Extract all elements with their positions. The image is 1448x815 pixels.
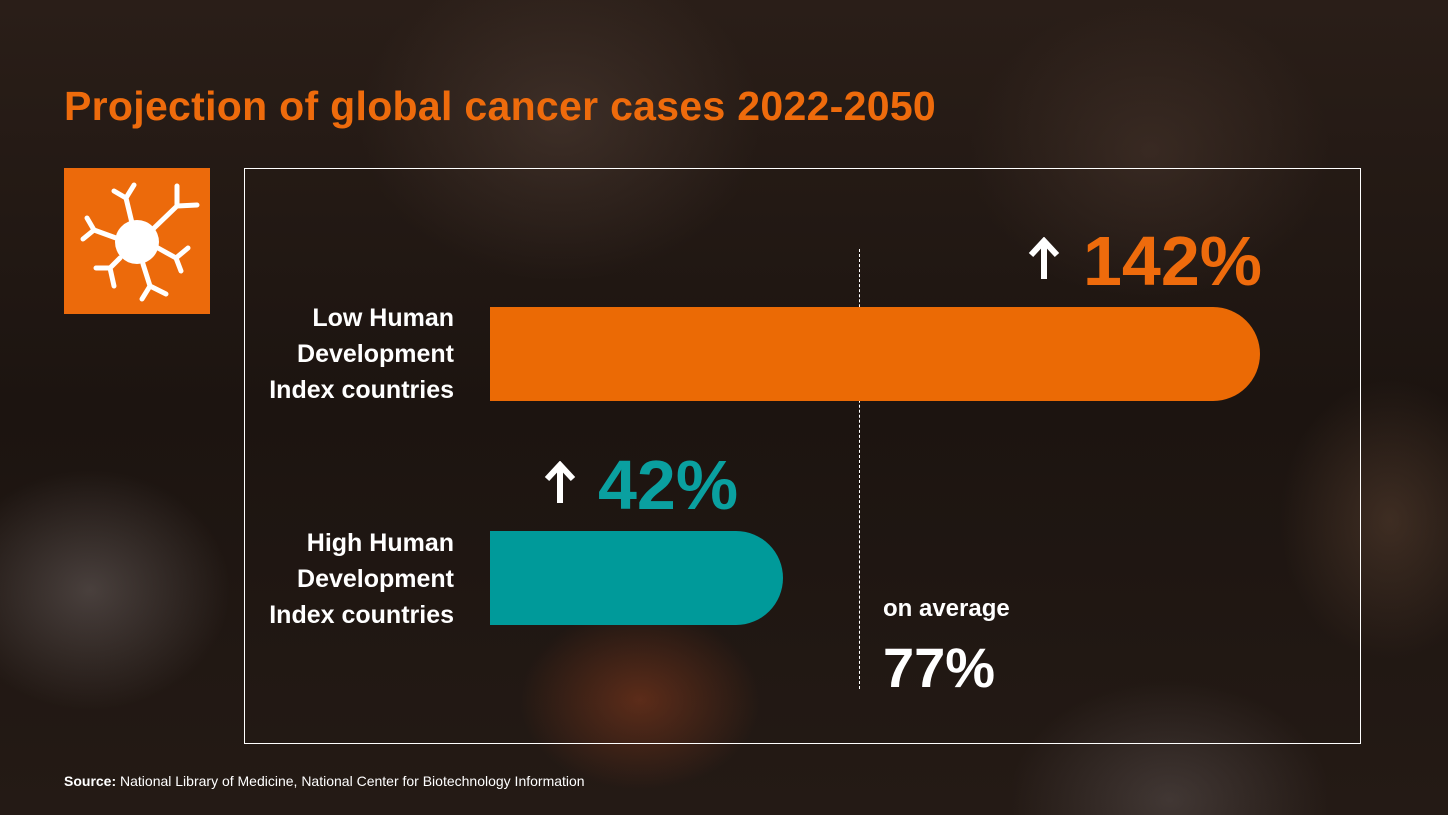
label: low HDI: Low Human xyxy=(312,304,454,332)
title: Projection of global cancer cases 2022-2050 xyxy=(64,83,936,129)
arrow up (42%) xyxy=(544,461,576,503)
bar: high HDI xyxy=(490,531,783,625)
label: low HDI: Development xyxy=(297,340,454,368)
average dashed line xyxy=(859,249,860,689)
label: low HDI: Index countries xyxy=(269,376,454,404)
source: Source: National Library of Medicine, National Center for Biotechnology Information xyxy=(64,773,585,789)
chart panel xyxy=(244,168,1361,744)
icon: cancer cell xyxy=(64,168,210,314)
average label: on average xyxy=(883,595,1010,622)
label: high HDI: High Human xyxy=(307,529,454,557)
value: 142%: 142% xyxy=(1083,222,1262,300)
label: high HDI: Development xyxy=(297,565,454,593)
label: low HDI xyxy=(269,304,454,404)
label: high HDI xyxy=(269,529,454,629)
bar: low HDI xyxy=(490,307,1260,401)
arrow up (142%) xyxy=(1028,237,1060,279)
label: high HDI: Index countries xyxy=(269,601,454,629)
average value: 77% xyxy=(883,636,995,699)
value: 42%: 42% xyxy=(598,446,738,524)
